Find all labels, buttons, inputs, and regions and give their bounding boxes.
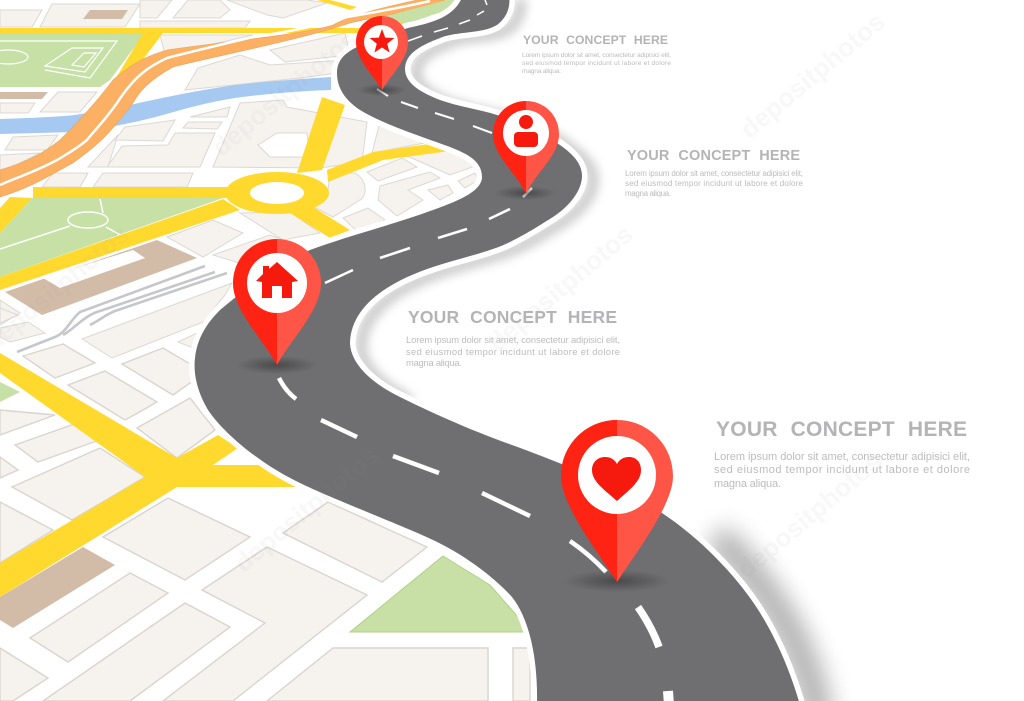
heading 1: YOUR CONCEPT HERE — [523, 33, 668, 47]
city blocks lower map — [0, 344, 530, 701]
body 4: magna aliqua. — [714, 478, 781, 490]
football park — [0, 33, 145, 87]
green triangle park — [350, 556, 525, 632]
text block 4 — [714, 418, 970, 490]
white lot — [43, 250, 145, 288]
text block 1 — [522, 33, 671, 75]
body 3: sed eiusmod tempor incidunt ut labore et dolore — [406, 346, 620, 357]
body 1: Lorem ipsum dolor sit amet, consectetur adipisici elit, — [522, 52, 671, 59]
body 3: magna aliqua. — [406, 357, 462, 368]
watermarks: depositphotos — [206, 24, 362, 162]
winding road — [195, 0, 800, 701]
second park with roundabout — [0, 198, 223, 277]
city blocks upper map — [0, 0, 478, 358]
body 2: sed eiusmod tempor incidunt ut labore et dolore — [625, 179, 804, 188]
heading 4: YOUR CONCEPT HERE — [716, 418, 967, 441]
body 4: sed eiusmod tempor incidunt ut labore et dolore — [714, 464, 970, 476]
roundabout centre — [250, 182, 304, 204]
yellow main junction — [0, 353, 302, 597]
brown lots — [0, 10, 197, 315]
body 2: Lorem ipsum dolor sit amet, consectetur adipisici elit, — [625, 169, 803, 178]
body 3 — [406, 334, 620, 368]
body 4 — [714, 451, 970, 490]
body 1: magna aliqua. — [522, 68, 561, 75]
pin 4: heart — [561, 420, 673, 592]
top green strip — [383, 0, 465, 24]
panel: isometric city map — [0, 0, 530, 701]
watermarks: depositphotos — [228, 440, 384, 578]
yellow roads upper — [0, 0, 457, 290]
white plaza — [258, 133, 310, 157]
watermarks: depositphotos — [734, 6, 890, 144]
watermarks: depositphotos — [731, 446, 887, 584]
brown lot lower — [0, 547, 115, 628]
body 3: Lorem ipsum dolor sit amet, consectetur adipisici elit, — [406, 334, 620, 345]
text block 3 — [406, 307, 620, 368]
watermarks — [0, 6, 890, 584]
body 2 — [625, 169, 804, 198]
heading 3: YOUR CONCEPT HERE — [408, 307, 617, 327]
body 1 — [522, 52, 671, 75]
orange highway — [0, 0, 445, 197]
watermarks: depositphotos — [482, 219, 638, 357]
body 4: Lorem ipsum dolor sit amet, consectetur adipisici elit, — [714, 451, 970, 463]
railway tracks — [17, 266, 227, 352]
body 2: magna aliqua. — [625, 189, 671, 198]
road surface — [195, 0, 800, 701]
small green corner — [0, 382, 20, 402]
heading 2: YOUR CONCEPT HERE — [627, 148, 800, 164]
road shadow — [361, 0, 820, 701]
pin 3: home — [233, 239, 321, 374]
lane dashes — [279, 0, 669, 701]
pin 1: star — [356, 16, 408, 96]
body 1: sed eiusmod tempor incidunt ut labore et dolore — [522, 60, 671, 67]
text block 2 — [625, 148, 804, 198]
pin 2: person — [493, 101, 559, 200]
river — [0, 77, 331, 134]
